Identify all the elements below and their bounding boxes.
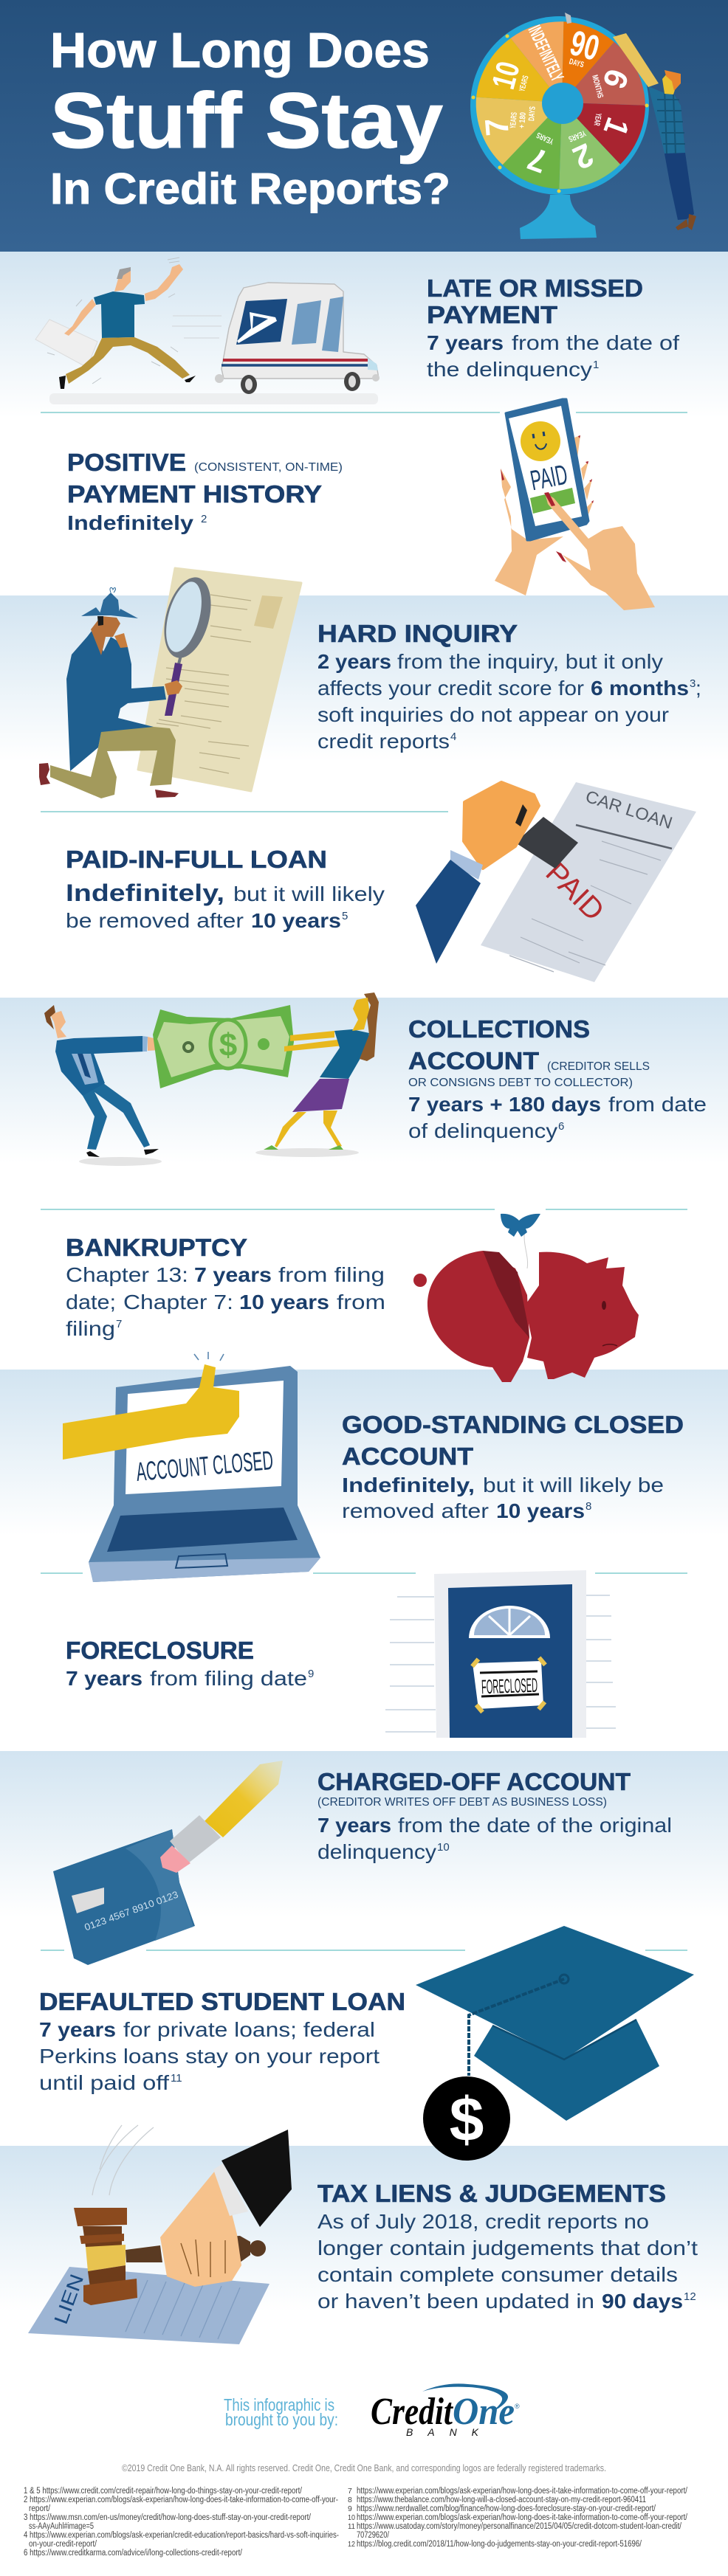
text: duration: Chapter 13:: [66, 1263, 188, 1286]
icon: prize wheel with time periods: 90: [566, 24, 603, 69]
panel: foreclosure: [66, 1570, 616, 1738]
icon: graduation cap chained to a ball: [416, 1926, 694, 2161]
text: duration: soft inquiries do not appear on your: [317, 703, 669, 726]
references: left column: 6 https://www.creditkarma.com/advice/i/long-collections-credit-report/: [24, 2549, 243, 2558]
panel: charged-off account: [53, 1761, 672, 1965]
icon: prize wheel with time periods: YEARS: [518, 75, 531, 92]
icon: prize wheel with time periods: YEARS: [509, 112, 519, 129]
heading: ACCOUNT: [342, 1443, 473, 1470]
heading: [427, 274, 643, 328]
icon: prize wheel with time periods: 6: [595, 64, 636, 93]
references: right column: 10: [348, 2513, 355, 2522]
logo: Credit One Bank: ®: [515, 2403, 520, 2410]
panel: late or missed payment: [35, 258, 679, 404]
text: duration: until paid off: [39, 2071, 169, 2094]
heading: FORECLOSURE: [66, 1637, 254, 1664]
icon: prize wheel with time periods: 7: [478, 117, 516, 137]
references: right column: 7: [348, 2487, 352, 2496]
text: duration: 9: [308, 1668, 314, 1680]
icon: prize wheel with time periods: 7: [523, 139, 552, 180]
heading: LATE OR MISSED: [427, 274, 643, 302]
text: duration: 10 years: [496, 1499, 585, 1522]
logo: Credit One Bank: Credit: [371, 2391, 453, 2433]
text: duration: affects your credit score for: [317, 677, 584, 700]
heading: HARD INQUIRY: [317, 620, 518, 647]
text: duration: date;: [66, 1291, 116, 1313]
icon: foreclosed front door: [385, 1570, 616, 1738]
icon: pencil erasing a credit card: [53, 1761, 283, 1965]
panel: positive payment history: [67, 399, 655, 610]
references: left column: ss-AAyAuhl#image=5: [29, 2522, 94, 2531]
references: right column: 8: [348, 2496, 352, 2504]
text: duration: the delinquency: [427, 358, 592, 381]
text: duration: but it will likely be: [483, 1474, 664, 1496]
text: duration: 10: [437, 1841, 450, 1854]
icon: prize wheel with time periods: DAYS: [569, 58, 585, 69]
text: details: longer contain judgements that don’t: [317, 2237, 698, 2259]
panel: tax liens and judgements: [28, 2125, 698, 2344]
text: duration: 2: [201, 513, 207, 525]
icon: prize wheel with time periods: + 180: [518, 112, 528, 129]
references: right column: https://blog.credit.com/2018/11/how-long-do-judgements-stay-on-your-credit-report-51696/: [357, 2540, 642, 2549]
panel: defaulted student loan: [39, 1926, 694, 2161]
icon: prize wheel with time periods: MONTHS: [590, 74, 605, 99]
heading: ACCOUNT: [408, 1047, 539, 1074]
heading: [342, 1411, 684, 1470]
references: left column: [24, 2487, 339, 2558]
panel: sponsor footer: [224, 2383, 520, 2438]
references: left column: report/: [29, 2504, 51, 2513]
text: duration: for private loans; federal: [123, 2018, 375, 2041]
icon: prize wheel with time periods: 1: [597, 113, 636, 141]
text: duration: from the date of: [512, 331, 679, 354]
text: brought to you by: This infographic is: [224, 2395, 334, 2414]
icon: hands tapping paid on a phone: PAID: [528, 460, 570, 497]
text: duration: 6: [558, 1120, 564, 1133]
references: right column: 70729620/: [357, 2531, 390, 2540]
icon: laptop with thumbs up: [63, 1352, 320, 1582]
icon: pencil erasing a credit card: 0123 4567 8910 0123: [83, 1889, 179, 1933]
heading: GOOD-STANDING CLOSED: [342, 1411, 684, 1438]
heading: POSITIVE: [67, 449, 186, 476]
icon: two people pulling a dollar bill: [44, 992, 379, 1166]
icon: prize wheel with time periods: INDEFINITELY: [524, 22, 568, 85]
panel: bankruptcy: [66, 1214, 639, 1382]
icon: detective inspecting a credit report: [39, 568, 301, 798]
icon: laptop with thumbs up: ACCOUNT CLOSED: [135, 1445, 275, 1487]
icon: broken piggy bank with butterfly: [413, 1214, 639, 1382]
text: duration: 7 years: [39, 2018, 116, 2041]
references: left column: 2 https://www.experian.com/blogs/ask-experian/how-long-does-it-take-information-to-come-off-your-: [24, 2496, 338, 2504]
text: duration: 6 months: [591, 677, 689, 700]
text: details: [317, 2210, 698, 2313]
text: duration: from: [337, 1291, 385, 1313]
logo: Credit One Bank: One: [453, 2391, 515, 2433]
heading: OR CONSIGNS DEBT TO COLLECTOR): [408, 1077, 633, 1089]
text: duration: [66, 1667, 314, 1690]
icon: gavel striking a lien document: LIEN: [49, 2271, 88, 2327]
text: duration: 2 years: [317, 650, 391, 673]
title: [50, 23, 450, 213]
icon: prize wheel with time periods: 2: [568, 136, 599, 176]
panel: header: [0, 0, 728, 252]
text: duration: from filing date: [150, 1667, 307, 1690]
heading: (CREDITOR SELLS: [547, 1060, 650, 1073]
references: right column: 12: [348, 2540, 355, 2549]
text: duration: of delinquency: [408, 1119, 557, 1142]
heading: COLLECTIONS: [408, 1015, 590, 1043]
text: duration: Chapter 7:: [123, 1291, 233, 1313]
icon: foreclosed front door: FORECLOSED: [481, 1674, 538, 1698]
text: brought to you by: brought to you by:: [225, 2410, 338, 2429]
text: duration: Perkins loans stay on your report: [39, 2045, 380, 2068]
text: duration: [342, 1474, 664, 1522]
text: duration: 4: [450, 731, 456, 743]
text: duration: filing: [66, 1317, 115, 1340]
icon: prize wheel with time periods: DAYS: [527, 106, 538, 122]
text: duration: be removed after: [66, 909, 244, 932]
icon: prize wheel with time periods: 10: [485, 58, 527, 93]
text: duration: Indefinitely: [67, 511, 193, 534]
text: brought to you by: [224, 2395, 338, 2429]
text: duration: 1: [593, 359, 599, 371]
text: duration: [66, 1263, 385, 1340]
text: duration: Indefinitely,: [342, 1474, 475, 1496]
icon: graduation cap chained to a ball: $: [450, 2085, 484, 2154]
references: left column: 4 https://www.experian.com/blogs/ask-experian/credit-education/report-basics/hard-vs-soft-inquiries-: [24, 2531, 339, 2540]
text: duration: Indefinitely,: [66, 880, 224, 906]
text: duration: [317, 1814, 672, 1863]
title: How Long Does: [50, 23, 430, 78]
text: duration: 7: [116, 1318, 122, 1330]
text: duration: from date: [608, 1093, 707, 1116]
references: left column: on-your-credit-report/: [29, 2540, 97, 2549]
panel: paid-in-full loan: [66, 782, 696, 982]
text: duration: 11: [171, 2072, 182, 2085]
icon: man spinning the wheel: [613, 33, 696, 230]
heading: TAX LIENS & JUDGEMENTS: [317, 2180, 666, 2207]
text: details: contain complete consumer details: [317, 2263, 678, 2286]
logo: Credit One Bank: BANK: [406, 2426, 479, 2438]
text: duration: [317, 650, 701, 753]
heading: PAID-IN-FULL LOAN: [66, 846, 327, 873]
heading: BANKRUPTCY: [66, 1234, 247, 1261]
text: duration: 10 years: [251, 909, 341, 932]
text: duration: credit reports: [317, 730, 450, 753]
panel: collections account: [44, 992, 707, 1166]
icon: gavel striking a lien document: [28, 2125, 292, 2344]
heading: [67, 449, 343, 508]
icon: hand stamping paid on a car loan: CAR LOAN: [583, 787, 675, 832]
icon: prize wheel with time periods: YEARS: [535, 131, 555, 146]
references: left column: 3 https://www.msn.com/en-us/money/credit/how-long-does-stuff-stay-on-your-credit-report/: [24, 2513, 312, 2522]
icon: hand stamping paid on a car loan: [416, 782, 696, 982]
panel: good-standing closed account: [63, 1352, 684, 1582]
text: details: or haven’t been updated in: [317, 2290, 594, 2313]
text: duration: 7 years: [427, 331, 504, 354]
text: duration: removed after: [342, 1499, 489, 1522]
text: duration: 8: [586, 1500, 591, 1513]
text: details: 90 days: [602, 2290, 683, 2313]
text: duration: 7 years: [317, 1814, 391, 1837]
text: duration: from the date of the original: [398, 1814, 672, 1837]
text: details: 12: [684, 2290, 696, 2303]
text: duration: delinquency: [317, 1840, 436, 1863]
text: duration: from filing: [278, 1263, 385, 1286]
text: details: As of July 2018, credit reports no: [317, 2210, 649, 2233]
text: duration: [427, 331, 679, 381]
icon: mail carrier chasing a mail truck: [35, 258, 380, 404]
text: duration: [408, 1093, 707, 1142]
icon: two people pulling a dollar bill: $: [219, 1027, 237, 1063]
icon: prize wheel with time periods: [470, 13, 649, 239]
references: right column: https://www.nerdwallet.com/blog/finance/how-long-does-foreclosure-stay-on-your-credit-report/: [357, 2504, 656, 2513]
text: duration: from the inquiry, but it only: [397, 650, 663, 673]
references: right column: 11: [348, 2522, 355, 2531]
references: right column: [348, 2487, 688, 2549]
copyright line: ©2019 Credit One Bank, N.A. All rights reserved. Credit One, Credit One Bank, and corresponding logos are federally registered trademarks.: [122, 2462, 606, 2473]
icon: hand stamping paid on a car loan: PAID: [540, 856, 611, 927]
text: duration: 5: [342, 910, 348, 922]
heading: [408, 1015, 650, 1089]
references: right column: 9: [348, 2504, 352, 2513]
references: left column: 1 & 5 https://www.credit.com/credit-repair/how-long-do-things-stay-on-your-credit-report/: [24, 2487, 303, 2496]
heading: PAYMENT: [427, 301, 557, 328]
text: duration: [39, 2018, 380, 2094]
references: right column: https://www.thebalance.com/how-long-will-a-closed-account-stay-on-my-credit-report-960411: [357, 2496, 646, 2504]
title: In Credit Reports?: [50, 165, 450, 213]
icon: hands tapping paid on a phone: [495, 399, 655, 610]
heading: [317, 1768, 631, 1809]
heading: CHARGED-OFF ACCOUNT: [317, 1768, 631, 1795]
title: Stuff Stay: [50, 76, 443, 165]
icon: prize wheel with time periods: YEAR: [592, 112, 602, 126]
text: duration: 3: [690, 677, 696, 690]
panel: hard inquiry: [39, 568, 701, 798]
logo: Credit One Bank: [371, 2383, 520, 2438]
heading: (CONSISTENT, ON-TIME): [194, 461, 343, 474]
text: duration: [66, 880, 385, 932]
heading: PAYMENT HISTORY: [67, 480, 322, 508]
heading: DEFAULTED STUDENT LOAN: [39, 1988, 405, 2015]
text: duration: but it will likely: [233, 883, 385, 905]
icon: prize wheel with time periods: YEARS: [567, 128, 587, 143]
text: duration: ;: [696, 677, 701, 700]
text: duration: 7 years: [66, 1667, 142, 1690]
text: duration: 10 years: [239, 1291, 329, 1313]
heading: (CREDITOR WRITES OFF DEBT AS BUSINESS LOSS): [317, 1796, 607, 1809]
text: duration: 7 years: [194, 1263, 272, 1286]
text: duration: 7 years + 180 days: [408, 1093, 601, 1116]
